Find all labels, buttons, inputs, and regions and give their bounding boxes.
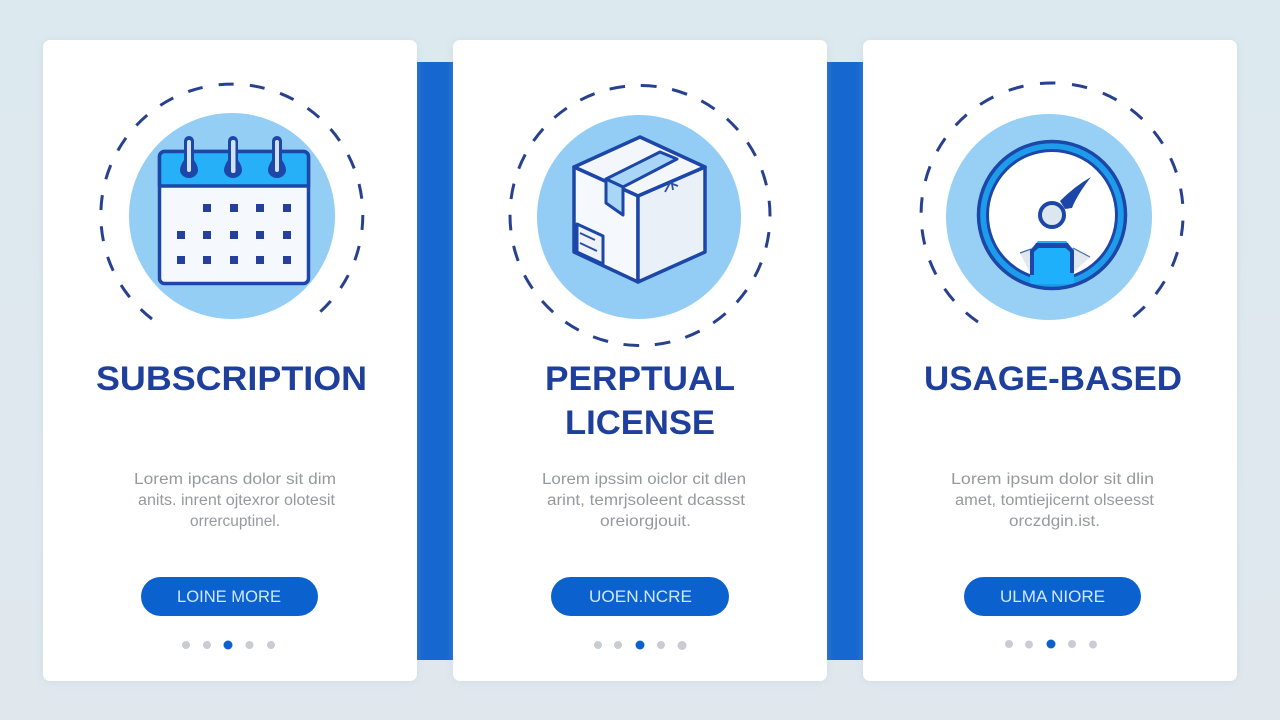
body text: orczdgin.ist. [1009,513,1100,530]
connector band right [827,62,863,660]
pagination dots [1005,640,1097,648]
body text: amet, tomtiejicernt olseesst [955,492,1155,509]
button [964,577,1141,616]
button [141,577,318,616]
panel: usage-based [863,40,1237,681]
heading: LICENSE [565,404,715,442]
button: UOEN.NCRE [589,587,692,606]
panel: subscription [43,40,417,681]
button: ULMA NIORE [1000,587,1105,606]
body text: oreiorgjouit. [600,513,691,530]
icon: gauge in dashed circle [921,83,1183,322]
connector band left [417,62,453,660]
body text: Lorem ipsum dolor sit dlin [951,471,1154,488]
panel: perpetual license [453,40,827,681]
heading: PERPTUAL [545,360,735,398]
body text: orrercuptinel. [190,513,280,530]
body text: Lorem ipcans dolor sit dim [134,471,336,488]
body text [134,471,336,530]
icon: calendar in dashed circle [101,84,363,319]
pagination dots [594,640,686,650]
body text: arint, temrjsoleent dcassst [547,492,746,509]
body text: anits. inrent ojtexror olotesit [138,492,336,509]
body text [542,471,746,530]
body text [951,471,1155,530]
heading: USAGE-BASED [924,360,1182,398]
button: LOINE MORE [177,587,281,606]
body text: Lorem ipssim oiclor cit dlen [542,471,746,488]
button [551,577,729,616]
pagination dots [182,640,275,650]
heading: SUBSCRIPTION [96,360,367,398]
heading [545,360,735,442]
icon: box in dashed circle [510,86,770,345]
